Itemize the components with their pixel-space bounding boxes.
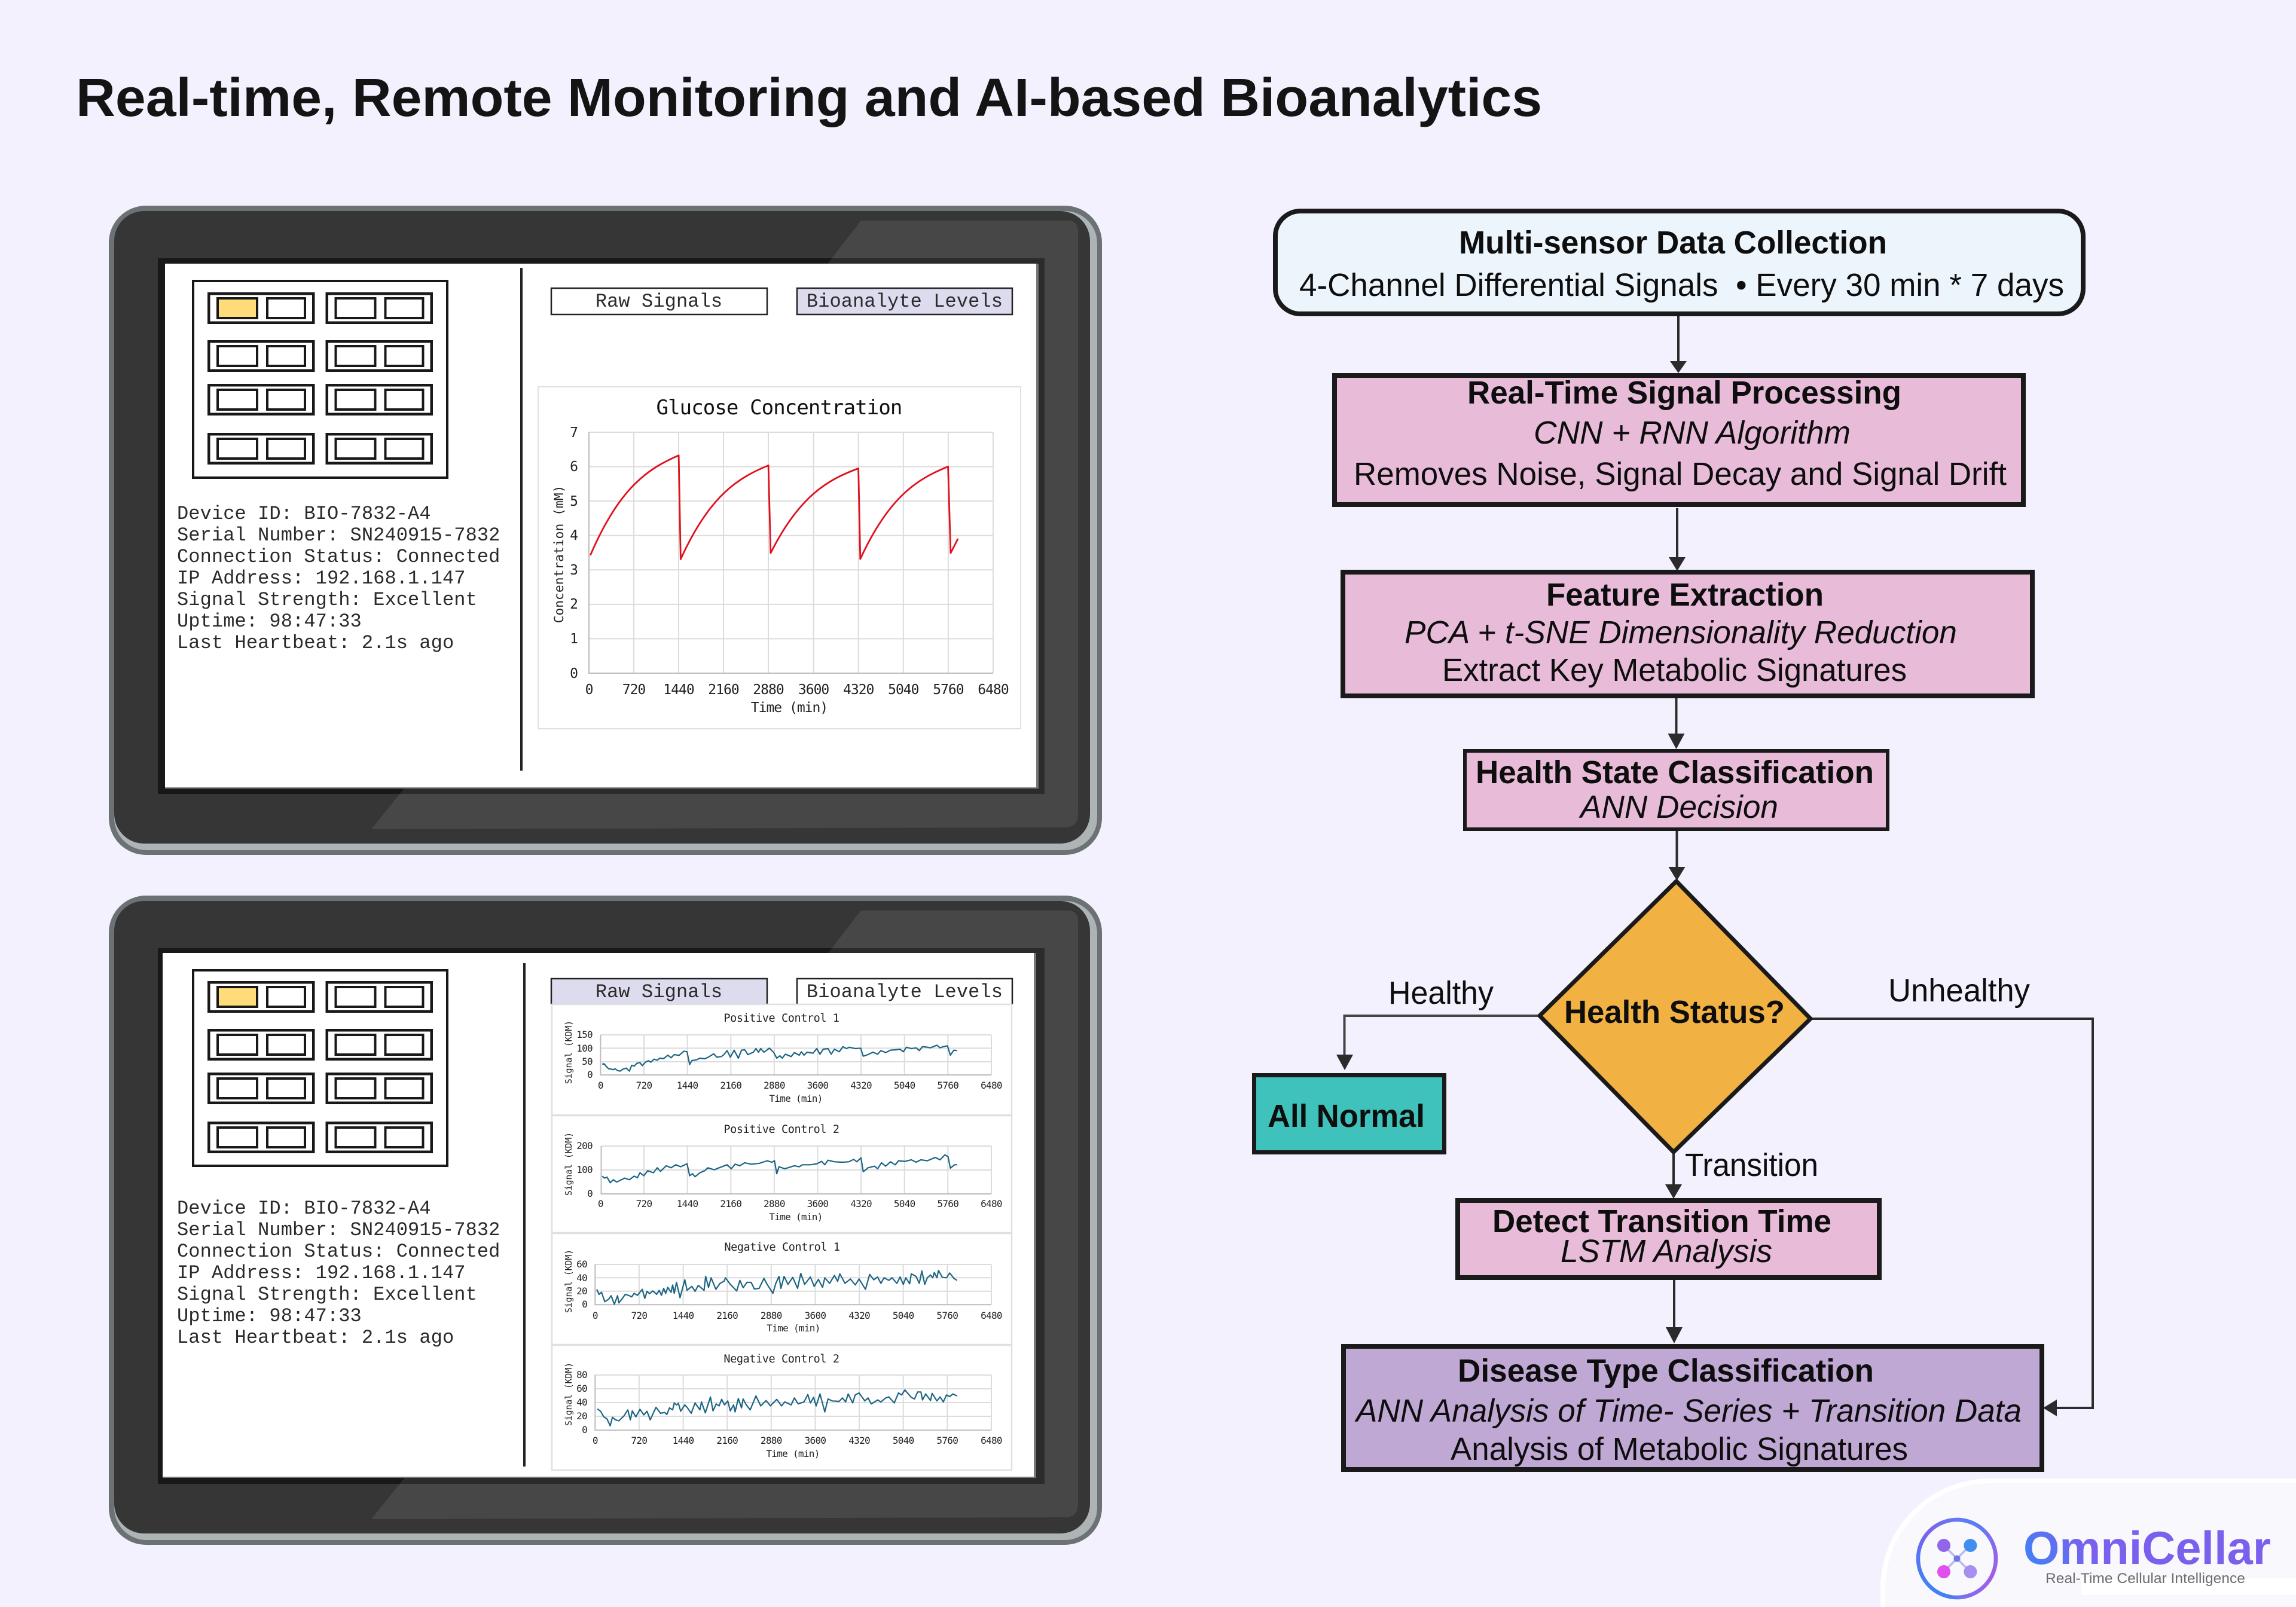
x axis ticks: 5040: [893, 1310, 914, 1321]
device information: Signal Strength: Excellent: [177, 589, 477, 611]
logo backdrop: [1880, 1478, 2296, 1607]
chart title: Positive Control 1: [723, 1012, 839, 1025]
x axis ticks: 3600: [798, 682, 829, 698]
y axis ticks: 40: [576, 1397, 587, 1408]
x axis ticks: 4320: [848, 1435, 870, 1446]
x axis ticks: [585, 682, 1009, 698]
y axis ticks: 0: [587, 1188, 593, 1199]
box: disease type classification: [1344, 1346, 2042, 1469]
chart: negative control 2: [552, 1345, 1012, 1470]
label: transition: Transition: [1685, 1147, 1818, 1183]
tab: raw signals: [551, 288, 767, 314]
y axis label: Signal (KDM): [564, 1021, 574, 1084]
screen: [163, 953, 1036, 1478]
tagline: Real-Time Cellular Intelligence: [2045, 1571, 2245, 1587]
y axis ticks: 40: [576, 1272, 587, 1284]
x axis ticks: 2880: [761, 1310, 782, 1321]
x axis ticks: 2880: [764, 1198, 785, 1209]
y axis ticks: [570, 425, 578, 682]
x axis label: Time (min): [751, 700, 828, 716]
y axis label: Signal (KDM): [564, 1249, 574, 1313]
x axis ticks: 0: [585, 682, 593, 698]
y axis ticks: 6: [570, 459, 578, 475]
arrow: unhealthy branch: [1811, 1019, 2093, 1416]
x axis ticks: 2880: [753, 682, 784, 698]
x axis ticks: 2880: [761, 1435, 782, 1446]
x axis ticks: 2160: [720, 1198, 741, 1209]
y axis ticks: 0: [570, 666, 578, 682]
detail: Extract Key Metabolic Signatures: [1442, 652, 1907, 688]
x axis ticks: 5040: [893, 1435, 914, 1446]
y axis label: Concentration (mM): [552, 485, 567, 623]
y axis ticks: 0: [582, 1424, 587, 1435]
decision: health status: Health Status?: [1564, 994, 1785, 1030]
chart: glucose concentration: [538, 387, 1021, 729]
y axis ticks: [576, 1140, 593, 1199]
x axis ticks: [593, 1310, 1002, 1321]
box: health state classification: [1465, 751, 1888, 829]
device information: Uptime: 98:47:33: [177, 610, 362, 633]
box: detect transition time: [1458, 1200, 1879, 1278]
heading: Health State Classification: [1476, 754, 1874, 790]
x axis ticks: 1440: [677, 1080, 698, 1091]
heading: Disease Type Classification: [1458, 1353, 1874, 1389]
y axis ticks: 2: [570, 597, 578, 612]
x axis ticks: 4320: [850, 1080, 872, 1091]
well plate map: [193, 970, 447, 1166]
x axis ticks: 0: [593, 1310, 598, 1321]
heading: Multi-sensor Data Collection: [1459, 225, 1887, 261]
x axis ticks: 5760: [937, 1198, 958, 1209]
tablet casing: [109, 896, 1102, 1545]
y axis ticks: 0: [587, 1069, 593, 1080]
x axis ticks: 3600: [805, 1310, 826, 1321]
chart title: Negative Control 2: [723, 1353, 839, 1365]
x axis ticks: 2160: [716, 1310, 738, 1321]
y axis ticks: 60: [576, 1258, 587, 1270]
x axis ticks: 2880: [764, 1080, 785, 1091]
method: CNN + RNN Algorithm: [1534, 415, 1851, 451]
device information: Serial Number: SN240915-7832: [177, 1219, 500, 1241]
y axis label: Signal (KDM): [564, 1362, 574, 1426]
tab: raw signals: Raw Signals: [596, 291, 722, 313]
device information: Device ID: BIO-7832-A4: [177, 1197, 431, 1220]
y axis ticks: 200: [576, 1140, 593, 1151]
y axis ticks: 100: [576, 1164, 593, 1175]
signal trace: [597, 1270, 957, 1304]
heading: Real-Time Signal Processing: [1467, 375, 1901, 411]
device information: IP Address: 192.168.1.147: [177, 1262, 466, 1284]
device information: Last Heartbeat: 2.1s ago: [177, 632, 454, 654]
method: LSTM Analysis: [1561, 1233, 1772, 1269]
x axis ticks: 2160: [720, 1080, 741, 1091]
y axis ticks: 60: [576, 1383, 587, 1394]
title: Real-time, Remote Monitoring and AI-based Bioanalytics: [76, 68, 1542, 128]
arrow: transition time to disease classification: [1666, 1280, 1683, 1343]
x axis ticks: [598, 1080, 1002, 1091]
device information: [177, 503, 500, 654]
y axis ticks: 20: [576, 1410, 587, 1422]
y axis ticks: [576, 1369, 587, 1435]
x axis ticks: 4320: [850, 1198, 872, 1209]
device information: Connection Status: Connected: [177, 1241, 500, 1263]
divider: [523, 963, 526, 1467]
x axis label: Time (min): [769, 1093, 823, 1104]
arrow: extraction to classification: [1668, 698, 1685, 749]
label: healthy: Healthy: [1388, 975, 1494, 1011]
x axis ticks: 5040: [888, 682, 919, 698]
heading: Detect Transition Time: [1492, 1203, 1831, 1239]
glucose trace: [590, 456, 958, 559]
box: real-time signal processing: [1335, 375, 2023, 505]
chart: negative control 1: [552, 1233, 1012, 1345]
icon: cell network: [1918, 1520, 1996, 1597]
x axis ticks: 5040: [894, 1080, 915, 1091]
tab: bioanalyte levels: Bioanalyte Levels: [807, 291, 1003, 313]
x axis ticks: 720: [622, 682, 645, 698]
x axis ticks: 2160: [708, 682, 739, 698]
x axis ticks: 3600: [805, 1435, 826, 1446]
brand name: OmniCellar: [2023, 1522, 2271, 1574]
box: all normal: [1254, 1075, 1445, 1153]
device information: Connection Status: Connected: [177, 546, 500, 568]
device information: Signal Strength: Excellent: [177, 1284, 477, 1306]
box: feature extraction: [1343, 572, 2032, 696]
detail: 4-Channel Differential Signals • Every 30 min * 7 days: [1299, 267, 2064, 303]
x axis ticks: 1440: [673, 1435, 694, 1446]
tab: raw signals: [551, 979, 767, 1004]
x axis ticks: 0: [598, 1198, 603, 1209]
x axis ticks: 720: [631, 1310, 647, 1321]
x axis ticks: 5760: [936, 1435, 958, 1446]
x axis ticks: 5040: [894, 1198, 915, 1209]
x axis label: Time (min): [769, 1211, 823, 1223]
x axis ticks: 720: [636, 1198, 652, 1209]
x axis ticks: 6480: [978, 682, 1009, 698]
x axis ticks: 2160: [716, 1435, 738, 1446]
chart: positive control 2: [552, 1116, 1012, 1233]
device information: IP Address: 192.168.1.147: [177, 567, 466, 589]
x axis ticks: 6480: [981, 1198, 1002, 1209]
x axis ticks: 6480: [981, 1080, 1002, 1091]
x axis ticks: 5760: [933, 682, 964, 698]
x axis ticks: 1440: [663, 682, 694, 698]
x axis ticks: 6480: [981, 1310, 1002, 1321]
method: ANN Analysis of Time- Series + Transition Data: [1354, 1393, 2022, 1429]
x axis ticks: 6480: [981, 1435, 1002, 1446]
device information: [177, 1197, 500, 1349]
x axis ticks: 0: [593, 1435, 598, 1446]
device information: Last Heartbeat: 2.1s ago: [177, 1327, 454, 1349]
panel: tablet raw signals: [109, 896, 1102, 1545]
y axis ticks: 50: [582, 1056, 593, 1067]
screen: [165, 264, 1039, 789]
tab: raw signals: Raw Signals: [596, 981, 722, 1003]
y axis ticks: 1: [570, 631, 578, 647]
x axis label: Time (min): [767, 1322, 820, 1334]
x axis ticks: 720: [631, 1435, 647, 1446]
well plate map: [193, 281, 447, 478]
x axis ticks: 720: [636, 1080, 652, 1091]
signal trace: [597, 1390, 957, 1426]
y axis ticks: 7: [570, 425, 578, 441]
decision: health status: [1540, 881, 1810, 1152]
y axis ticks: 4: [570, 528, 578, 543]
box: multi-sensor data collection: [1275, 211, 2083, 314]
y axis ticks: 100: [576, 1043, 593, 1054]
x axis ticks: 3600: [807, 1080, 828, 1091]
method: ANN Decision: [1578, 789, 1778, 825]
tablet casing: [109, 206, 1102, 855]
signal trace: [602, 1045, 957, 1071]
chart title: Negative Control 1: [724, 1241, 840, 1254]
x axis ticks: [598, 1198, 1002, 1209]
device information: Uptime: 98:47:33: [177, 1305, 362, 1327]
y axis label: Signal (KDM): [564, 1132, 574, 1196]
chart title: Glucose Concentration: [657, 396, 902, 420]
device information: Serial Number: SN240915-7832: [177, 524, 500, 546]
panel: tablet bioanalyte levels: [109, 206, 1102, 855]
arrow: transition branch: [1665, 1153, 1682, 1199]
tab: bioanalyte levels: Bioanalyte Levels: [807, 981, 1003, 1003]
label: unhealthy: Unhealthy: [1888, 973, 2030, 1009]
arrow: healthy branch: [1336, 1016, 1540, 1070]
y axis ticks: 150: [576, 1029, 593, 1040]
divider: [520, 268, 523, 771]
logo: omnicellar: [1918, 1520, 2271, 1597]
detail: Analysis of Metabolic Signatures: [1451, 1431, 1908, 1467]
x axis ticks: 4320: [843, 682, 874, 698]
x axis ticks: 5760: [937, 1080, 958, 1091]
x axis ticks: 5760: [936, 1310, 958, 1321]
device information: Device ID: BIO-7832-A4: [177, 503, 431, 525]
y axis ticks: 20: [576, 1285, 587, 1297]
y axis ticks: 5: [570, 494, 578, 509]
chart: positive control 1: [552, 1004, 1012, 1115]
x axis ticks: 3600: [807, 1198, 828, 1209]
box: all normal: All Normal: [1268, 1098, 1425, 1134]
heading: Feature Extraction: [1546, 577, 1824, 613]
signal trace: [602, 1155, 957, 1183]
y axis ticks: [576, 1029, 593, 1080]
x axis label: Time (min): [766, 1448, 820, 1459]
arrow: processing to extraction: [1669, 508, 1686, 571]
y axis ticks: 3: [570, 563, 578, 578]
x axis ticks: 4320: [848, 1310, 870, 1321]
detail: Removes Noise, Signal Decay and Signal Drift: [1354, 456, 2007, 492]
chart title: Positive Control 2: [723, 1123, 839, 1136]
arrow: classification to decision: [1668, 831, 1685, 881]
x axis ticks: 1440: [677, 1198, 698, 1209]
x axis ticks: [593, 1435, 1002, 1446]
y axis ticks: 0: [582, 1299, 587, 1310]
arrow: collection to processing: [1670, 316, 1687, 373]
x axis ticks: 1440: [673, 1310, 694, 1321]
y axis ticks: 80: [576, 1369, 587, 1380]
y axis ticks: [576, 1258, 587, 1310]
x axis ticks: 0: [598, 1080, 603, 1091]
method: PCA + t-SNE Dimensionality Reduction: [1405, 615, 1957, 650]
